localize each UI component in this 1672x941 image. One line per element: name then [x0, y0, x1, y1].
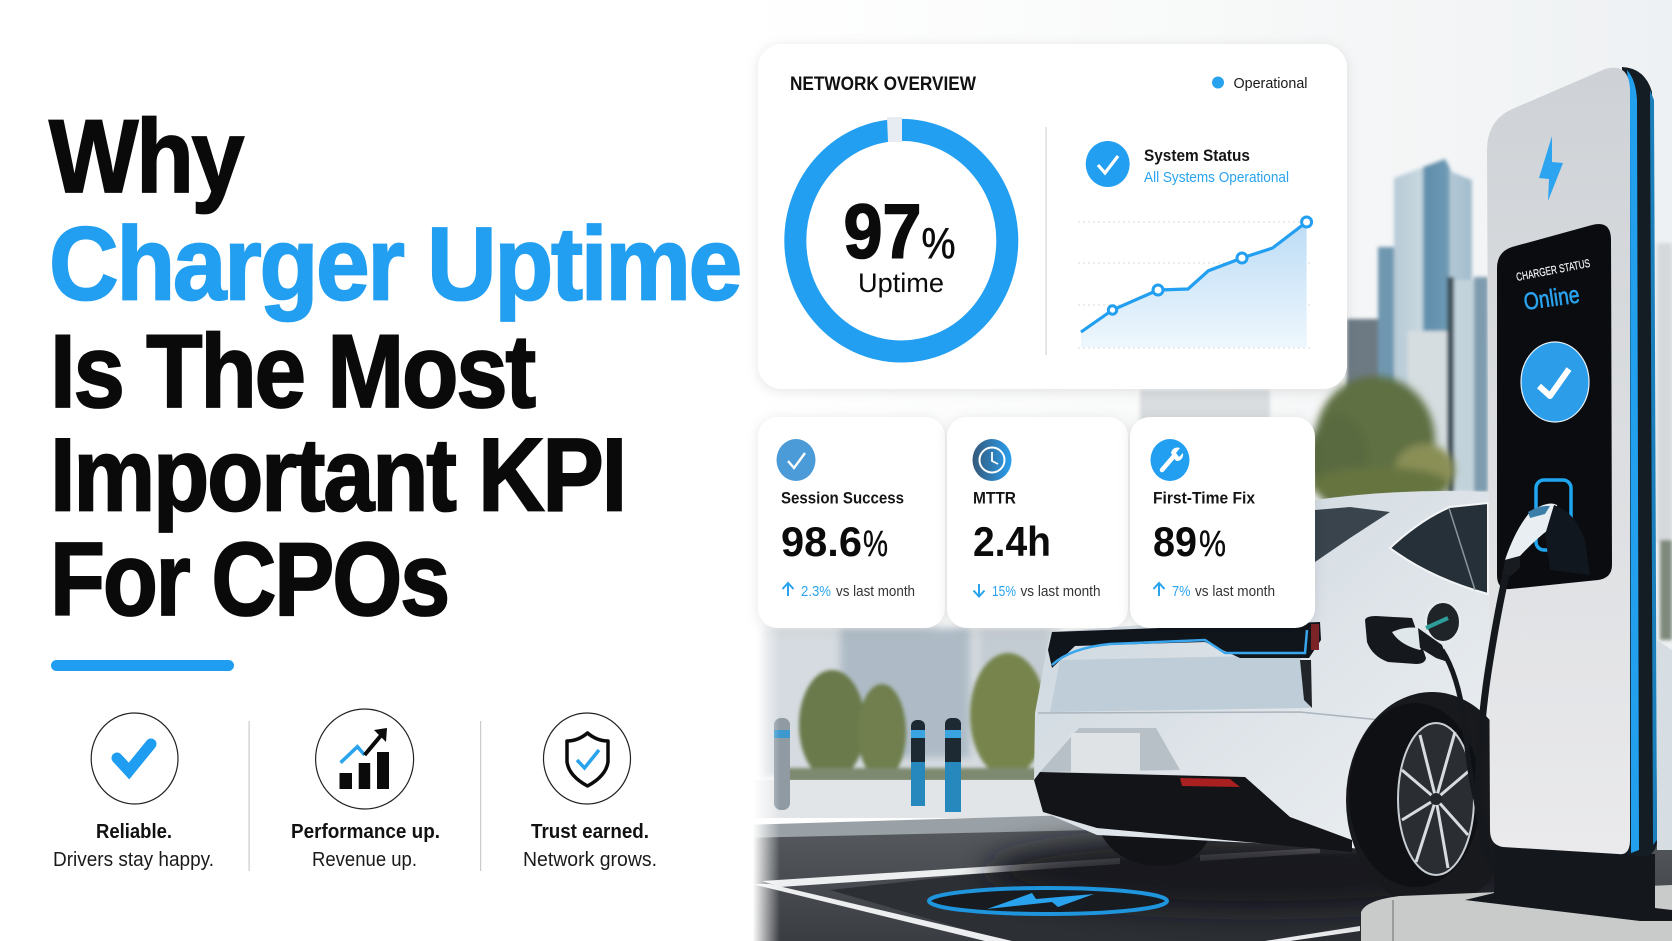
- plug grip: [1502, 556, 1520, 578]
- body crease: [1038, 712, 1400, 722]
- icon: check in circle: [91, 713, 178, 804]
- card: first-time fix: [1130, 417, 1315, 628]
- card: mttr: [947, 417, 1128, 628]
- trees behind car: [1308, 376, 1455, 506]
- title: Charger Uptime: [49, 206, 740, 322]
- uptime label: Uptime: [858, 268, 944, 298]
- icon: shield with check: [544, 713, 630, 804]
- rear far wheel: [1097, 825, 1213, 866]
- icon: lightning bolt: [1539, 136, 1563, 201]
- icon: wrench: [1150, 439, 1190, 481]
- tail light bar: [1048, 622, 1321, 668]
- title: Is The Most: [50, 314, 536, 430]
- card: session success: [758, 417, 945, 628]
- uptime trend line chart: [1078, 217, 1312, 348]
- socket outline: [1536, 480, 1571, 550]
- panel: network overview: [758, 44, 1347, 389]
- online label: Online: [1522, 281, 1581, 316]
- charger screen: [1497, 224, 1612, 589]
- concrete island: [1361, 885, 1672, 941]
- card: mttr: MTTR: [973, 488, 1016, 508]
- charging spot marking: [929, 888, 1167, 914]
- trend: down: 15%: [992, 584, 1016, 600]
- benefit: trust: [523, 713, 657, 871]
- performance text: Performance up.: [291, 821, 440, 843]
- uptime donut: %: [922, 219, 956, 268]
- card: first-time fix: %: [1199, 523, 1226, 564]
- car body: [1034, 491, 1490, 870]
- card: session success: 98.6: [781, 518, 862, 565]
- charger status label: CHARGER STATUS: [1515, 258, 1591, 284]
- card: first-time fix: 89: [1153, 518, 1197, 565]
- trunk shading: [1050, 655, 1310, 712]
- car cable: [1442, 650, 1492, 868]
- card: mttr: 2.4h: [973, 518, 1051, 565]
- license plate: [1071, 733, 1140, 772]
- license plate recess: [1040, 728, 1180, 772]
- icon: rising bar chart: [316, 709, 414, 809]
- rear window: [1315, 507, 1390, 562]
- body far side: [1657, 640, 1672, 850]
- icon: status check: [1521, 342, 1589, 422]
- benefit: trust: Network grows.: [523, 849, 657, 871]
- wheel arch: [1346, 692, 1518, 908]
- tire: [1349, 703, 1481, 887]
- charger side strips: [1622, 67, 1657, 857]
- parking lines: [752, 848, 1360, 941]
- street trees: [780, 653, 1070, 782]
- photo: city street with parked electric car: [738, 0, 1672, 941]
- panel background: [758, 44, 1347, 389]
- system status: All Systems Operational: [1144, 169, 1289, 186]
- charge port: [1365, 616, 1426, 664]
- title: [49, 99, 740, 638]
- pavement and curb: [740, 780, 1110, 818]
- system status: [1086, 141, 1289, 187]
- uptime donut: [795, 117, 1007, 352]
- icon: clock: [972, 439, 1012, 481]
- rim: [1398, 723, 1474, 875]
- divider: [248, 721, 250, 871]
- icon: status check: [1086, 141, 1130, 187]
- trend: up: [782, 583, 915, 600]
- panel heading: NETWORK OVERVIEW: [790, 73, 977, 95]
- trend: up: [1154, 583, 1275, 600]
- reflector: [1180, 778, 1240, 787]
- sky: [740, 0, 1672, 941]
- benefit: reliable: [53, 713, 214, 871]
- distant street buildings: [760, 628, 1060, 778]
- title: For CPOs: [50, 522, 448, 638]
- operational indicator: Operational: [1234, 75, 1308, 92]
- car plug: [1392, 628, 1430, 650]
- title: Why: [49, 99, 244, 215]
- title: Important KPI: [50, 418, 625, 534]
- port flap: [1426, 602, 1460, 642]
- skyline buildings: [1140, 159, 1672, 640]
- charger station: [1442, 67, 1672, 921]
- reliable text: Reliable.: [96, 821, 172, 843]
- uptime value: 97: [844, 189, 922, 275]
- benefit: performance: Revenue up.: [312, 849, 417, 871]
- system status: System Status: [1144, 146, 1250, 165]
- plug head: [1505, 504, 1558, 560]
- lower bumper: [1034, 772, 1352, 852]
- asphalt parking bay: [740, 830, 1672, 941]
- electric car: [1034, 491, 1672, 908]
- benefit: performance: [291, 709, 440, 871]
- benefit: reliable: Drivers stay happy.: [53, 849, 214, 871]
- trust text: Trust earned.: [531, 821, 649, 843]
- trend: down: vs last month: [1020, 584, 1100, 600]
- left photo fade: [738, 0, 780, 941]
- title accent bar: [51, 660, 234, 671]
- trend: up: 7%: [1172, 584, 1191, 600]
- side window: [1390, 503, 1488, 594]
- panel divider: [1046, 127, 1047, 355]
- car shadow: [985, 834, 1525, 910]
- charger front face: [1487, 68, 1630, 854]
- icon: check: [776, 439, 816, 481]
- trend: down: [974, 584, 1100, 600]
- bollards: [774, 718, 961, 812]
- trend: up: vs last month: [1195, 584, 1275, 600]
- card: session success: %: [863, 523, 888, 564]
- card: first-time fix: First-Time Fix: [1153, 488, 1256, 508]
- charger base: [1465, 846, 1672, 921]
- charging cable: [1478, 575, 1506, 860]
- card: session success: Session Success: [781, 488, 904, 508]
- divider: [480, 721, 481, 871]
- trend: up: vs last month: [836, 584, 915, 600]
- trend: up: 2.3%: [801, 584, 831, 600]
